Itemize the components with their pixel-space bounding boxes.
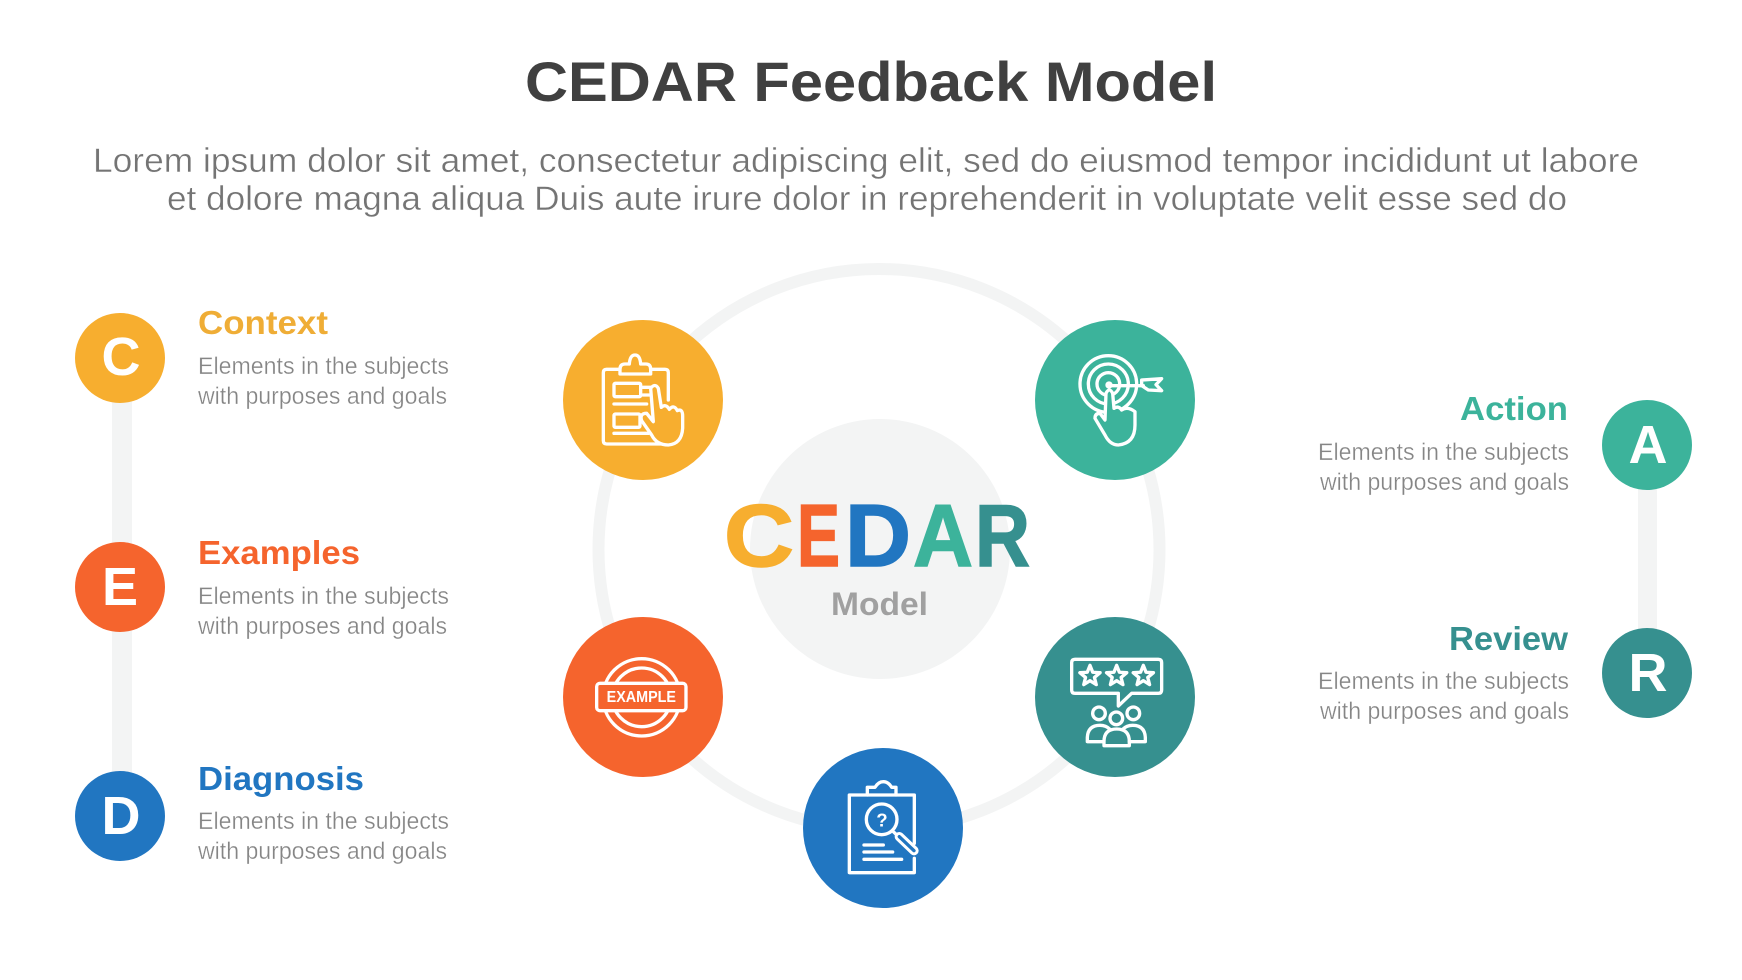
text: context: Elements in the subjects [198, 353, 449, 380]
text: diagnosis: with purposes and goals [197, 838, 447, 865]
text: diagnosis: Diagnosis [198, 760, 364, 797]
left connector [112, 358, 132, 816]
icon: review rating bubble and people [1035, 617, 1195, 777]
right connector [1638, 445, 1657, 673]
title: CEDAR Feedback Model [525, 50, 1217, 113]
badge: R: R [1628, 643, 1668, 703]
icon: diagnosis clipboard with magnifier: ? [876, 809, 888, 830]
center circle [750, 419, 1010, 679]
text: diagnosis [197, 760, 449, 865]
badge: A: A [1628, 415, 1668, 475]
badge: A [1602, 400, 1692, 490]
badge: D: D [102, 786, 140, 846]
center label: CEDAR Model: A [913, 486, 973, 585]
text: examples: Elements in the subjects [198, 583, 449, 610]
icon: diagnosis clipboard with magnifier [803, 748, 963, 908]
icon: examples stamp: EXAMPLE [607, 689, 676, 706]
text: review [1318, 620, 1569, 725]
icon: action target with hand [1035, 320, 1195, 480]
center label: CEDAR Model: C [724, 486, 794, 585]
badge: R [1602, 628, 1692, 718]
text: examples: Examples [198, 534, 360, 571]
icon: examples stamp [563, 617, 723, 777]
badge: E [75, 542, 165, 632]
icon: context clipboard with hand [563, 320, 723, 480]
text: action: with purposes and goals [1319, 469, 1569, 496]
text: context [197, 304, 449, 410]
badge: C [75, 313, 165, 403]
badge: E: E [102, 557, 138, 617]
big ring [598, 269, 1160, 830]
text: examples: with purposes and goals [197, 613, 447, 640]
text: action [1318, 390, 1569, 496]
text: action: Action [1460, 390, 1568, 427]
subtitle text: Lorem ipsum dolor sit amet, consectetur adipiscing elit, sed do eiusmod tempor incididunt ut labore [93, 142, 1639, 180]
text: diagnosis: Elements in the subjects [198, 808, 449, 835]
center label: CEDAR Model [724, 486, 1030, 622]
text: action: Elements in the subjects [1318, 439, 1569, 466]
text: review: Elements in the subjects [1318, 668, 1569, 695]
center label: CEDAR Model: E [797, 486, 840, 585]
subtitle text [93, 142, 1639, 218]
center label: CEDAR Model: R [975, 486, 1030, 585]
center label: CEDAR Model: D [845, 486, 911, 585]
badge: C: C [102, 327, 140, 387]
subtitle text: et dolore magna aliqua Duis aute irure dolor in reprehenderit in voluptate velit esse sed do [167, 180, 1567, 218]
text: examples [197, 534, 449, 640]
text: review: Review [1449, 620, 1568, 657]
text: context: Context [198, 304, 328, 341]
badge: D [75, 771, 165, 861]
text: context: with purposes and goals [197, 383, 447, 410]
text: review: with purposes and goals [1319, 698, 1569, 725]
center label: CEDAR Model: Model [831, 586, 928, 622]
